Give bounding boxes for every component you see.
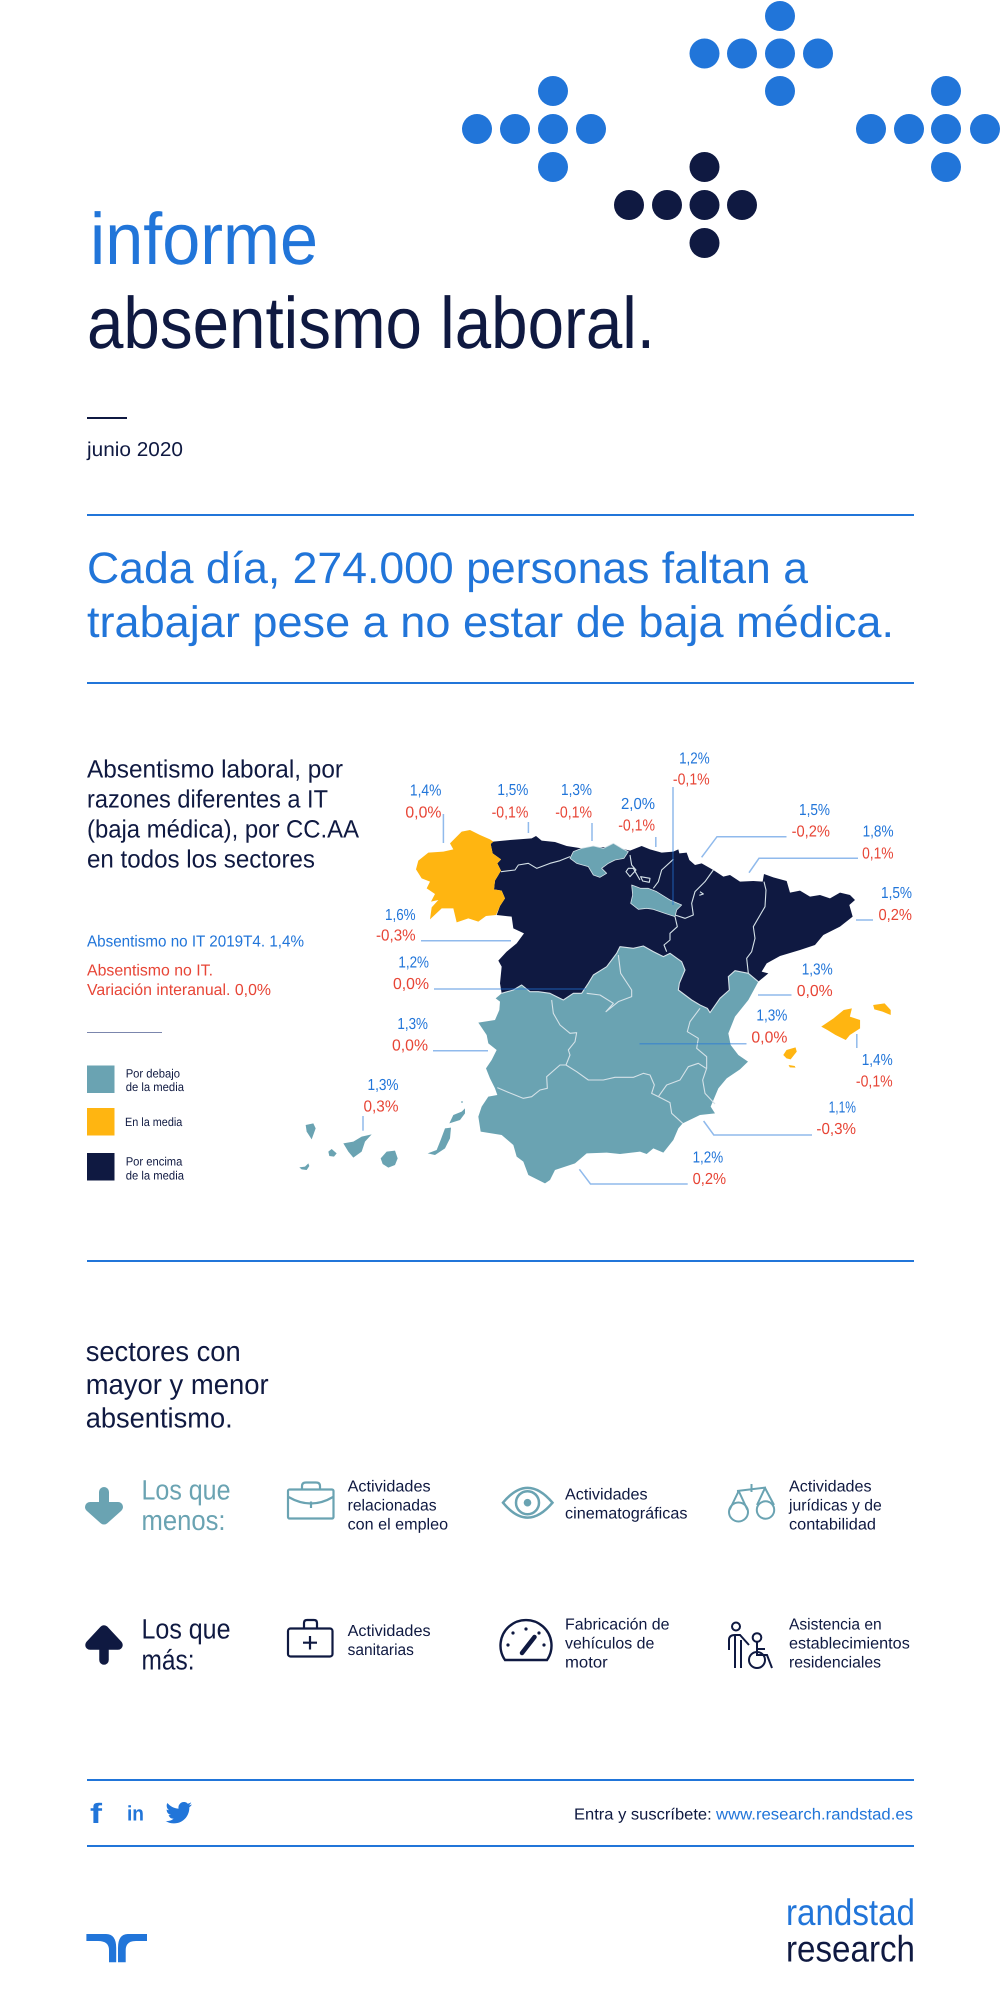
text: residencias: Asistencia en (789, 1616, 882, 1633)
map label: Euskadi (618, 796, 656, 847)
social icons (90, 1798, 192, 1829)
map label: Castilla y León: -0,3% (376, 928, 416, 945)
map label: Castilla-La Mancha: 0,0% (751, 1029, 787, 1046)
label: los que mas: Los que (142, 1613, 230, 1644)
label: los que mas: más: (142, 1644, 194, 1675)
map heading (87, 756, 359, 874)
title: informe (90, 199, 318, 280)
map label: Castilla y León: 1,6% (385, 907, 416, 924)
text: vehiculos: vehículos de (565, 1635, 654, 1652)
map label: Extremadura: 0,0% (392, 1038, 428, 1055)
map label: Aragón: 0,1% (862, 845, 894, 862)
icon: eye (503, 1488, 552, 1518)
map heading: en todos los sectores (87, 846, 315, 874)
social icons: f (90, 1798, 103, 1829)
sectors heading: sectores con (86, 1336, 241, 1367)
sectors heading: mayor y menor (86, 1369, 269, 1400)
map label: Cataluña: 0,2% (878, 907, 912, 924)
icon: up arrow (90, 1630, 118, 1660)
text: sanitarias (348, 1623, 431, 1659)
map label: Castilla-La Mancha: 1,3% (756, 1008, 787, 1025)
map label: Andalucía (579, 1149, 726, 1188)
map label: Baleares: -0,1% (856, 1074, 893, 1091)
text: cine (565, 1486, 688, 1522)
dot cross pattern: top (690, 1, 833, 106)
map label: Galicia (405, 783, 443, 843)
social icons: in (127, 1802, 144, 1826)
map label: Comunidad Valenciana: 0,0% (797, 983, 833, 1000)
icon: medical case (288, 1620, 332, 1656)
region: Canarias (299, 1101, 465, 1170)
legend: Por debajo (126, 1066, 180, 1080)
row: los que menos (90, 1474, 882, 1536)
map key notes: Variación interanual. 0,0% (87, 982, 271, 999)
date: junio 2020 (86, 439, 183, 461)
map label: Asturias: -0,1% (492, 804, 528, 821)
map label: Cataluña (856, 885, 912, 924)
randstad logo mark (86, 1934, 147, 1962)
map key notes (87, 934, 304, 999)
map label: La Rioja: -0,1% (673, 771, 710, 788)
map label: Baleares (856, 1034, 893, 1091)
icon: scales (729, 1484, 774, 1522)
map heading: (baja médica), por CC.AA (87, 816, 359, 844)
text: cine: Actividades (565, 1486, 648, 1503)
map label: Castilla y León (376, 907, 511, 945)
text: vehiculos (565, 1616, 670, 1672)
map label: Andalucía: 0,2% (693, 1171, 726, 1188)
map label: Murcia (704, 1099, 856, 1138)
region: Cantabria (570, 843, 628, 877)
text: vehiculos: Fabricación de (565, 1616, 670, 1633)
sectors heading: absentismo. (86, 1403, 233, 1434)
text: empleo: relacionadas (348, 1498, 437, 1515)
text: sanitarias: sanitarias (348, 1642, 414, 1659)
region: La Rioja (631, 885, 682, 917)
map label: Asturias (492, 782, 528, 833)
region: northern mainland (416, 830, 855, 1013)
label: los que menos: menos: (142, 1505, 226, 1536)
map heading: razones diferentes a IT (87, 786, 328, 814)
map key notes: Absentismo no IT. (87, 963, 213, 980)
map label: Extremadura (392, 1016, 488, 1055)
icon: briefcase (288, 1482, 334, 1518)
map label: Madrid: 1,2% (398, 954, 429, 971)
icon: person assisting wheelchair (729, 1622, 772, 1668)
dot cross pattern: navy (614, 152, 757, 258)
region: southern mainland (478, 933, 758, 1183)
map label: Cataluña: 1,5% (881, 885, 912, 902)
text: vehiculos: motor (565, 1655, 608, 1672)
map label: Cantabria (555, 782, 592, 841)
text: residencias: residenciales (789, 1655, 881, 1672)
map label: Aragón (749, 824, 894, 873)
icon: gauge (500, 1620, 552, 1660)
text: juridicas: contabilidad (789, 1517, 876, 1534)
map label: Euskadi: -0,1% (618, 818, 655, 835)
headline: trabajar pese a no estar de baja médica. (87, 598, 894, 647)
text: empleo: Actividades (348, 1479, 431, 1496)
map label: Navarra: -0,2% (792, 824, 830, 841)
headline: Cada día, 274.000 personas faltan a (87, 544, 809, 593)
map label: Comunidad Valenciana: 1,3% (802, 961, 833, 978)
map label: Comunidad Valenciana (758, 961, 833, 1000)
map label: Canarias: 1,3% (368, 1077, 398, 1094)
icon: down arrow (90, 1492, 118, 1520)
map label: La Rioja (673, 750, 710, 905)
text: residencias (789, 1616, 910, 1672)
legend: En la media (125, 1115, 183, 1129)
map label: Aragón: 1,8% (863, 824, 894, 841)
map label: Galicia: 1,4% (410, 783, 441, 800)
dot cross pattern: right (856, 76, 1000, 182)
title (87, 199, 655, 364)
region: Baleares (783, 1003, 891, 1068)
title: absentismo laboral. (87, 283, 655, 364)
map label: Asturias: 1,5% (497, 782, 528, 799)
map label: Canarias: 0,3% (364, 1099, 398, 1116)
row: los que más (90, 1613, 910, 1675)
subscribe link: Entra y suscríbete: (574, 1806, 712, 1823)
label: los que menos: Los que (142, 1474, 230, 1505)
map label: Cantabria: -0,1% (555, 804, 592, 821)
map label: Navarra (702, 802, 830, 857)
dot cross pattern: left (462, 76, 606, 182)
map label: Castilla-La Mancha (640, 1008, 787, 1046)
text: cine: cinematográficas (565, 1505, 688, 1522)
map label: Baleares: 1,4% (862, 1052, 893, 1069)
wordmark: randstad (786, 1892, 915, 1933)
map label: Murcia: 1,1% (829, 1099, 856, 1116)
map label: Navarra: 1,5% (799, 802, 830, 819)
map label: Galicia: 0,0% (405, 804, 441, 821)
map label: Euskadi: 2,0% (621, 796, 655, 813)
text: empleo: con el empleo (348, 1517, 448, 1534)
text: juridicas (788, 1479, 882, 1534)
wordmark (786, 1892, 915, 1970)
map heading: Absentismo laboral, por (87, 756, 343, 784)
text: residencias: establecimientos (789, 1635, 910, 1652)
legend: Por encima (126, 1155, 183, 1169)
text: sanitarias: Actividades (348, 1623, 431, 1640)
text: empleo (348, 1479, 448, 1534)
map of Spain (299, 830, 891, 1183)
map label: La Rioja: 1,2% (679, 750, 710, 767)
label: los que mas (142, 1613, 230, 1675)
map label: Extremadura: 1,3% (397, 1016, 428, 1033)
map label: Canarias (363, 1077, 398, 1131)
map key notes: Absentismo no IT 2019T4. 1,4% (87, 934, 304, 951)
headline (87, 544, 894, 647)
map label: Cantabria: 1,3% (561, 782, 592, 799)
text: juridicas: jurídicas y de (788, 1498, 882, 1515)
legend (87, 1066, 184, 1182)
map label: Madrid: 0,0% (393, 976, 429, 993)
legend: de la media (126, 1080, 184, 1094)
subscribe link (574, 1806, 913, 1823)
legend: de la media (126, 1168, 184, 1182)
label: los que menos (142, 1474, 230, 1536)
subscribe link: www.research.randstad.es (715, 1806, 913, 1823)
sectors heading (86, 1336, 269, 1434)
map label: Madrid (393, 954, 586, 993)
map label: Andalucía: 1,2% (693, 1149, 723, 1166)
text: juridicas: Actividades (789, 1479, 872, 1496)
map label: Murcia: -0,3% (816, 1121, 856, 1138)
region: Galicia (416, 830, 505, 922)
wordmark: research (786, 1929, 915, 1970)
